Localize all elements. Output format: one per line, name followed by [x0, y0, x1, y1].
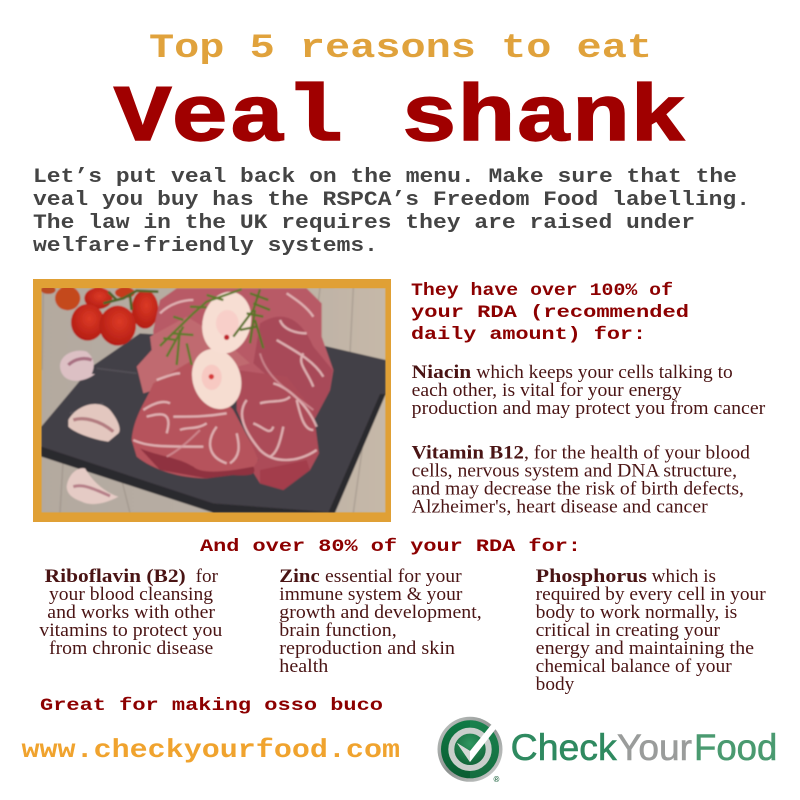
wordmark: Your	[617, 727, 692, 768]
intro text block: veal you buy has the RSPCA’s Freedom Food labelling.	[33, 189, 750, 212]
photo: veal shank on slate with orange frame	[33, 279, 391, 522]
text block: Zinc: health	[279, 656, 329, 677]
text block: Riboflavin: vitamins to protect you	[39, 620, 223, 641]
text block: Zinc: brain function,	[279, 620, 397, 641]
text block: Zinc: reproduction and skin	[279, 638, 456, 659]
text block: Zinc: essential for your	[325, 566, 462, 587]
text block: Riboflavin: for	[196, 566, 219, 587]
text block: Zinc	[279, 566, 482, 677]
text block: Riboflavin: your blood cleansing	[49, 584, 214, 605]
callout: osso buco: Great for making osso buco	[40, 696, 383, 716]
text block: Niacin: which keeps your cells talking to	[476, 362, 733, 383]
text block: Vitamin B12: , for the health of your blood	[524, 442, 751, 464]
subheading: over 100% RDA	[411, 281, 689, 345]
intro text block	[33, 166, 750, 258]
text block: Phosphorus: body	[536, 674, 575, 695]
icon: green check badge	[438, 717, 502, 784]
subheading: over 80% RDA: And over 80% of your RDA for:	[200, 537, 581, 557]
intro text block: The law in the UK requires they are raised under	[33, 212, 695, 235]
text block: Zinc: growth and development,	[279, 602, 482, 623]
text block: Riboflavin	[39, 566, 223, 659]
text block: Phosphorus: Phosphorus	[536, 566, 647, 587]
title: Top 5 reasons to eat: Top 5 reasons to eat	[149, 29, 652, 68]
text block: Vitamin B12: cells, nervous system and DNA structure,	[412, 460, 737, 482]
text block: Vitamin B12: Vitamin B12	[412, 442, 524, 464]
text block: Phosphorus	[536, 566, 766, 695]
subheading: over 100% RDA: your RDA (recommended	[411, 303, 689, 323]
text block: Phosphorus: critical in creating your	[536, 620, 721, 641]
wordmark: Food	[694, 727, 777, 768]
text block: Vitamin B12: Alzheimer's, heart disease and cancer	[412, 496, 708, 518]
heading: Veal shank: Veal shank	[114, 74, 687, 165]
wordmark	[511, 727, 777, 768]
text block: Riboflavin: Riboflavin (B2)	[45, 566, 186, 587]
text block: Niacin: Niacin	[412, 362, 472, 383]
intro text block: welfare-friendly systems.	[33, 235, 378, 258]
text block: Zinc: Zinc	[279, 566, 320, 587]
text block: Phosphorus: chemical balance of your	[536, 656, 732, 677]
text block: Phosphorus: which is	[652, 566, 716, 587]
subheading: over 100% RDA: They have over 100% of	[411, 281, 673, 301]
logo: CheckYourFood	[438, 717, 777, 784]
icon: green check badge: ®	[494, 775, 500, 784]
text block: Phosphorus: energy and maintaining the	[536, 638, 754, 659]
text block: Niacin: production and may protect you from cancer	[412, 398, 766, 419]
text block: Niacin	[412, 362, 766, 419]
text block: Niacin: each other, is vital for your energy	[412, 380, 682, 401]
wordmark: Check	[511, 727, 617, 768]
website url: www.checkyourfood.com	[22, 735, 400, 765]
subheading: over 100% RDA: daily amount) for:	[411, 325, 646, 345]
text block: Vitamin B12	[412, 442, 751, 518]
intro text block: Let’s put veal back on the menu. Make sure that the	[33, 166, 737, 189]
text block: Riboflavin: from chronic disease	[49, 638, 213, 659]
text block: Zinc: immune system & your	[279, 584, 463, 605]
text block: Phosphorus: required by every cell in your	[536, 584, 766, 605]
text block: Phosphorus: body to work normally, is	[536, 602, 737, 623]
text block: Vitamin B12: and may decrease the risk of birth defects,	[412, 478, 744, 500]
text block: Riboflavin: and works with other	[47, 602, 216, 623]
